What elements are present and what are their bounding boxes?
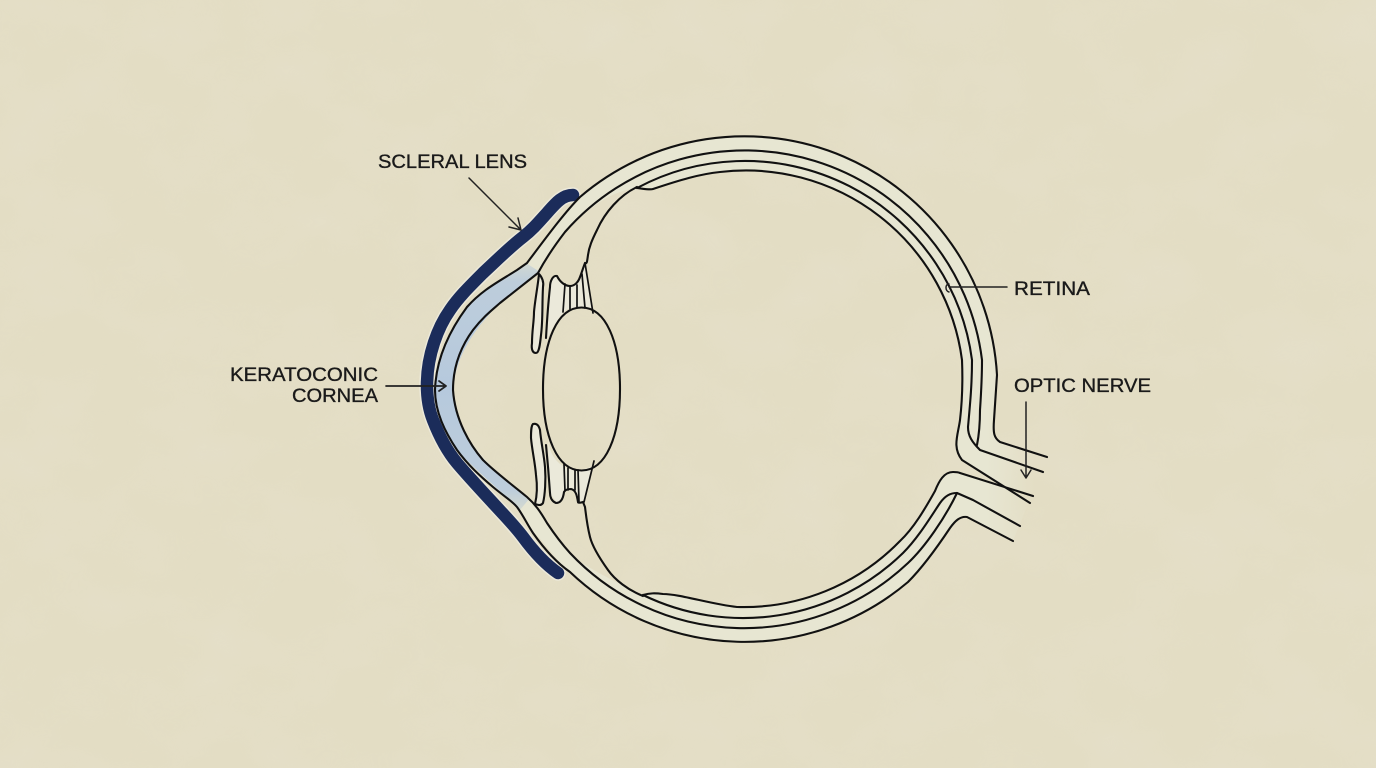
label: scleral lens: SCLERAL LENS (378, 151, 527, 173)
label: retina (946, 278, 1090, 300)
iris lower teardrop (531, 424, 545, 505)
iris and ciliary body fills (531, 263, 594, 505)
keratoconic cornea (blue) (435, 263, 540, 510)
scleral lens (navy) (427, 195, 573, 573)
label: keratoconic cornea (230, 364, 446, 407)
choroid layer line (upper) (637, 161, 1043, 472)
arrow: optic nerve (1021, 402, 1031, 478)
eye cross-section diagram (427, 136, 1047, 642)
choroid layer line (lower) (643, 493, 957, 618)
sclera wall fill (435, 136, 1047, 642)
label: keratoconic cornea: KERATOCONIC (230, 364, 378, 386)
label: scleral lens (378, 151, 527, 230)
outer sclera line with cornea front (435, 136, 1047, 642)
ciliary wall lower (546, 445, 643, 596)
middle layer line, cornea back (453, 150, 1020, 628)
zonule fibres upper (563, 263, 593, 313)
arrow: keratoconic cornea (386, 381, 446, 391)
retina line (lower) and lower nerve edge (643, 472, 1033, 607)
crystalline lens (543, 308, 620, 470)
label: retina: RETINA (1014, 278, 1090, 300)
arrow: scleral lens (469, 178, 521, 230)
leader line: retina (946, 284, 1007, 292)
ciliary wall upper (546, 187, 637, 338)
zonule fibres lower (564, 461, 594, 502)
iris upper teardrop (532, 274, 543, 353)
label: optic nerve: OPTIC NERVE (1014, 375, 1151, 397)
label: optic nerve (1014, 375, 1151, 478)
label: keratoconic cornea: CORNEA (292, 385, 378, 407)
retina line (637, 170, 1030, 503)
